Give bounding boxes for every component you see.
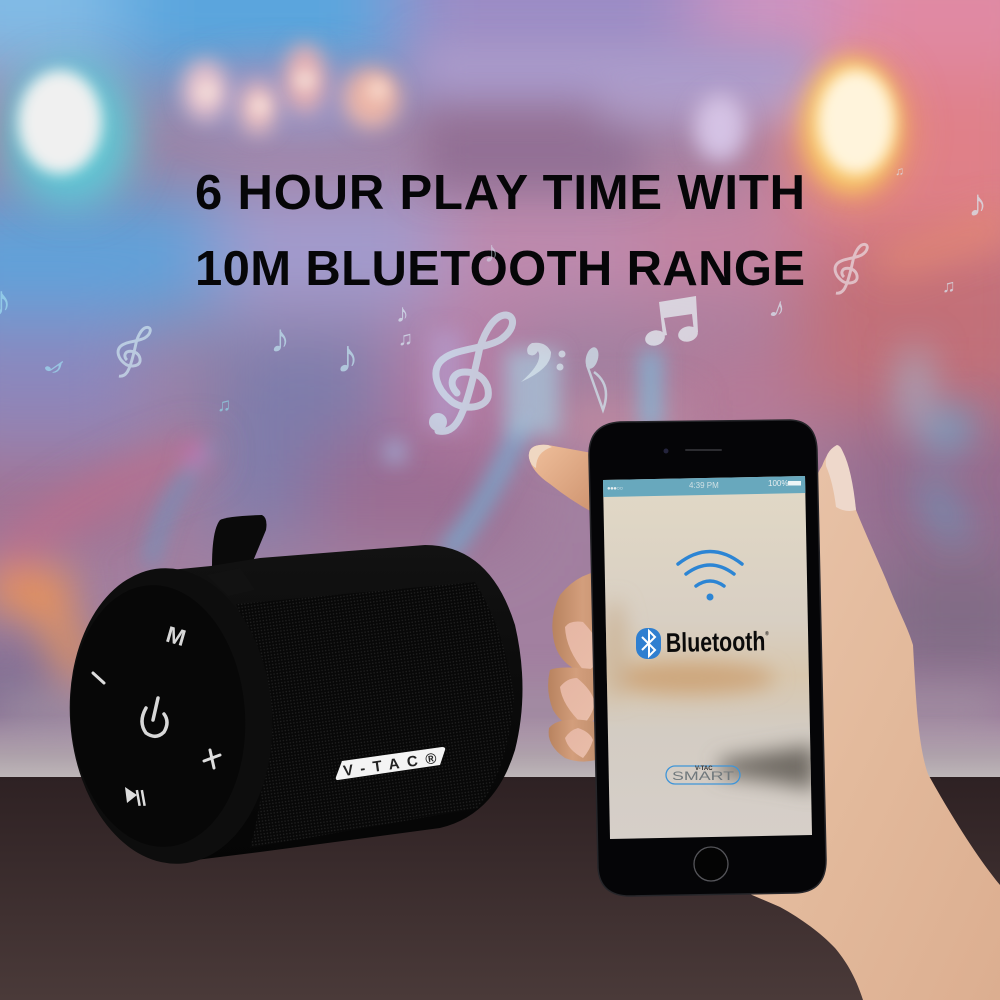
floating music notes: ♪	[765, 290, 791, 326]
finger two	[548, 668, 604, 727]
icon: bass clef	[521, 343, 566, 382]
title heading: 10M BLUETOOTH RANGE	[195, 242, 805, 296]
speaker	[60, 515, 523, 871]
icon: small treble clef left	[118, 327, 150, 376]
icon: bluetooth badge	[636, 628, 661, 659]
floating music notes: ♪	[36, 348, 76, 384]
title heading: 6 HOUR PLAY TIME WITH	[195, 166, 805, 220]
floating music notes: ♫	[398, 328, 413, 350]
icon: wifi	[678, 552, 742, 600]
table surface	[0, 777, 1000, 1000]
finger one	[552, 570, 612, 674]
play pause icon	[125, 787, 146, 806]
finger three	[549, 720, 596, 762]
phone holding hand	[529, 445, 1000, 1000]
floating music notes: ♫	[895, 164, 904, 178]
button minus	[93, 673, 104, 683]
screen blurs	[603, 600, 815, 790]
body	[170, 545, 522, 862]
icon: large treble clef	[429, 315, 513, 431]
status bar text: ●●●○○	[607, 486, 623, 492]
thumb nail	[826, 445, 856, 511]
nail one	[565, 622, 602, 672]
gripping fingers	[548, 570, 612, 762]
floating music notes: ♪	[968, 183, 987, 225]
phone body	[589, 420, 826, 896]
strap	[212, 515, 266, 566]
bluetooth wordmark: Bluetooth	[666, 626, 792, 658]
floating music notes: ♪	[270, 317, 290, 361]
grille	[236, 582, 514, 848]
icon: large beamed note	[643, 296, 700, 348]
floating music notes: ♫	[942, 276, 956, 296]
status bar text: 4:39 PM	[689, 481, 719, 490]
floating music notes: ♪	[396, 298, 409, 328]
camera and speaker	[664, 448, 722, 454]
nail two	[560, 678, 595, 725]
end cap outer	[60, 561, 282, 871]
power icon	[142, 698, 167, 736]
v-tac smart logo: SMART	[672, 769, 735, 783]
v-tac badge: V-TAC®	[342, 750, 438, 780]
button tab	[207, 568, 255, 596]
v-tac smart logo	[666, 766, 740, 784]
nail three	[565, 728, 593, 758]
title heading	[195, 166, 805, 296]
button plus	[204, 750, 220, 768]
index finger behind phone	[529, 445, 592, 512]
screen	[603, 476, 812, 839]
icon: inverted eighth note	[583, 346, 606, 410]
status bar text	[607, 479, 801, 492]
phone	[589, 420, 826, 896]
status bar	[603, 476, 805, 497]
v-tac smart logo: V-TAC	[695, 766, 713, 772]
index nail	[529, 445, 552, 468]
floating music notes: ♪	[336, 330, 359, 382]
status bar text: 100%	[768, 479, 788, 488]
button M: M	[163, 621, 189, 651]
wall fade above table	[0, 723, 1000, 777]
home button	[694, 847, 728, 881]
bluetooth wordmark: ®	[765, 630, 769, 637]
floating music notes: ♫	[217, 395, 231, 416]
palm and thumb	[745, 445, 1000, 1000]
end cap inner	[62, 579, 254, 853]
floating music notes: ♪	[484, 236, 499, 269]
floating music notes	[0, 164, 987, 416]
blurred concert background	[0, 0, 1000, 790]
icon: small treble clef right	[835, 244, 867, 293]
